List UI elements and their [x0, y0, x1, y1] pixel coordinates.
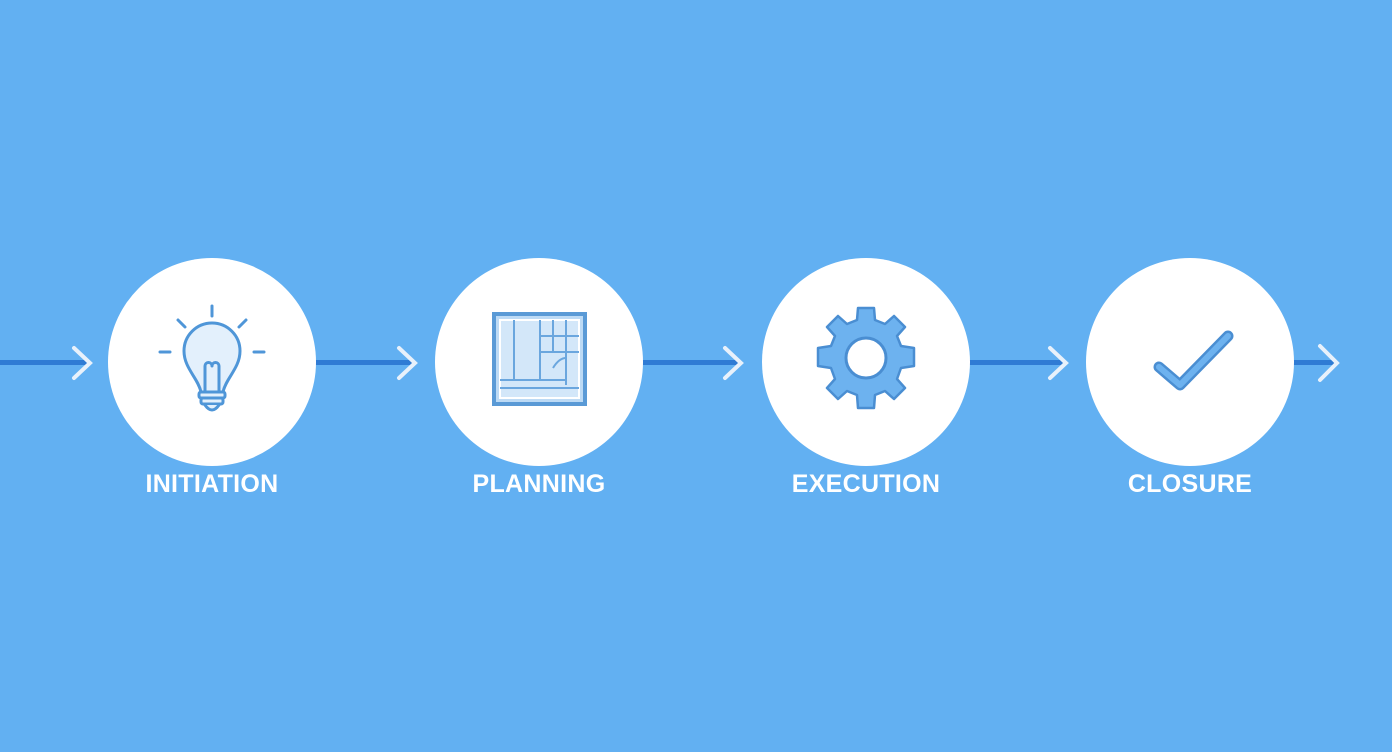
step: planning: [435, 258, 643, 498]
label: initiation: INITIATION: [145, 470, 279, 498]
icon: gear: [818, 308, 914, 408]
icon: checkmark: [1159, 336, 1228, 385]
label: closure: CLOSURE: [1128, 470, 1252, 498]
connector line 4: [968, 360, 1064, 365]
step: closure: [1086, 258, 1294, 498]
arrow 1: [74, 348, 90, 378]
step: execution: [762, 258, 970, 498]
connector line 3: [643, 360, 739, 365]
arrow 3: [725, 348, 741, 378]
arrow 2: [399, 348, 415, 378]
icon: light bulb: [160, 306, 264, 410]
connector line 1: [0, 360, 88, 365]
arrow 4: [1050, 348, 1066, 378]
label: planning: PLANNING: [473, 470, 605, 498]
step: initiation: [108, 258, 316, 498]
icon: blueprint: [494, 314, 585, 404]
connector line 5: [1292, 360, 1334, 365]
connector line 2: [316, 360, 412, 365]
label: execution: EXECUTION: [792, 470, 940, 498]
arrow 5: [1320, 346, 1337, 380]
